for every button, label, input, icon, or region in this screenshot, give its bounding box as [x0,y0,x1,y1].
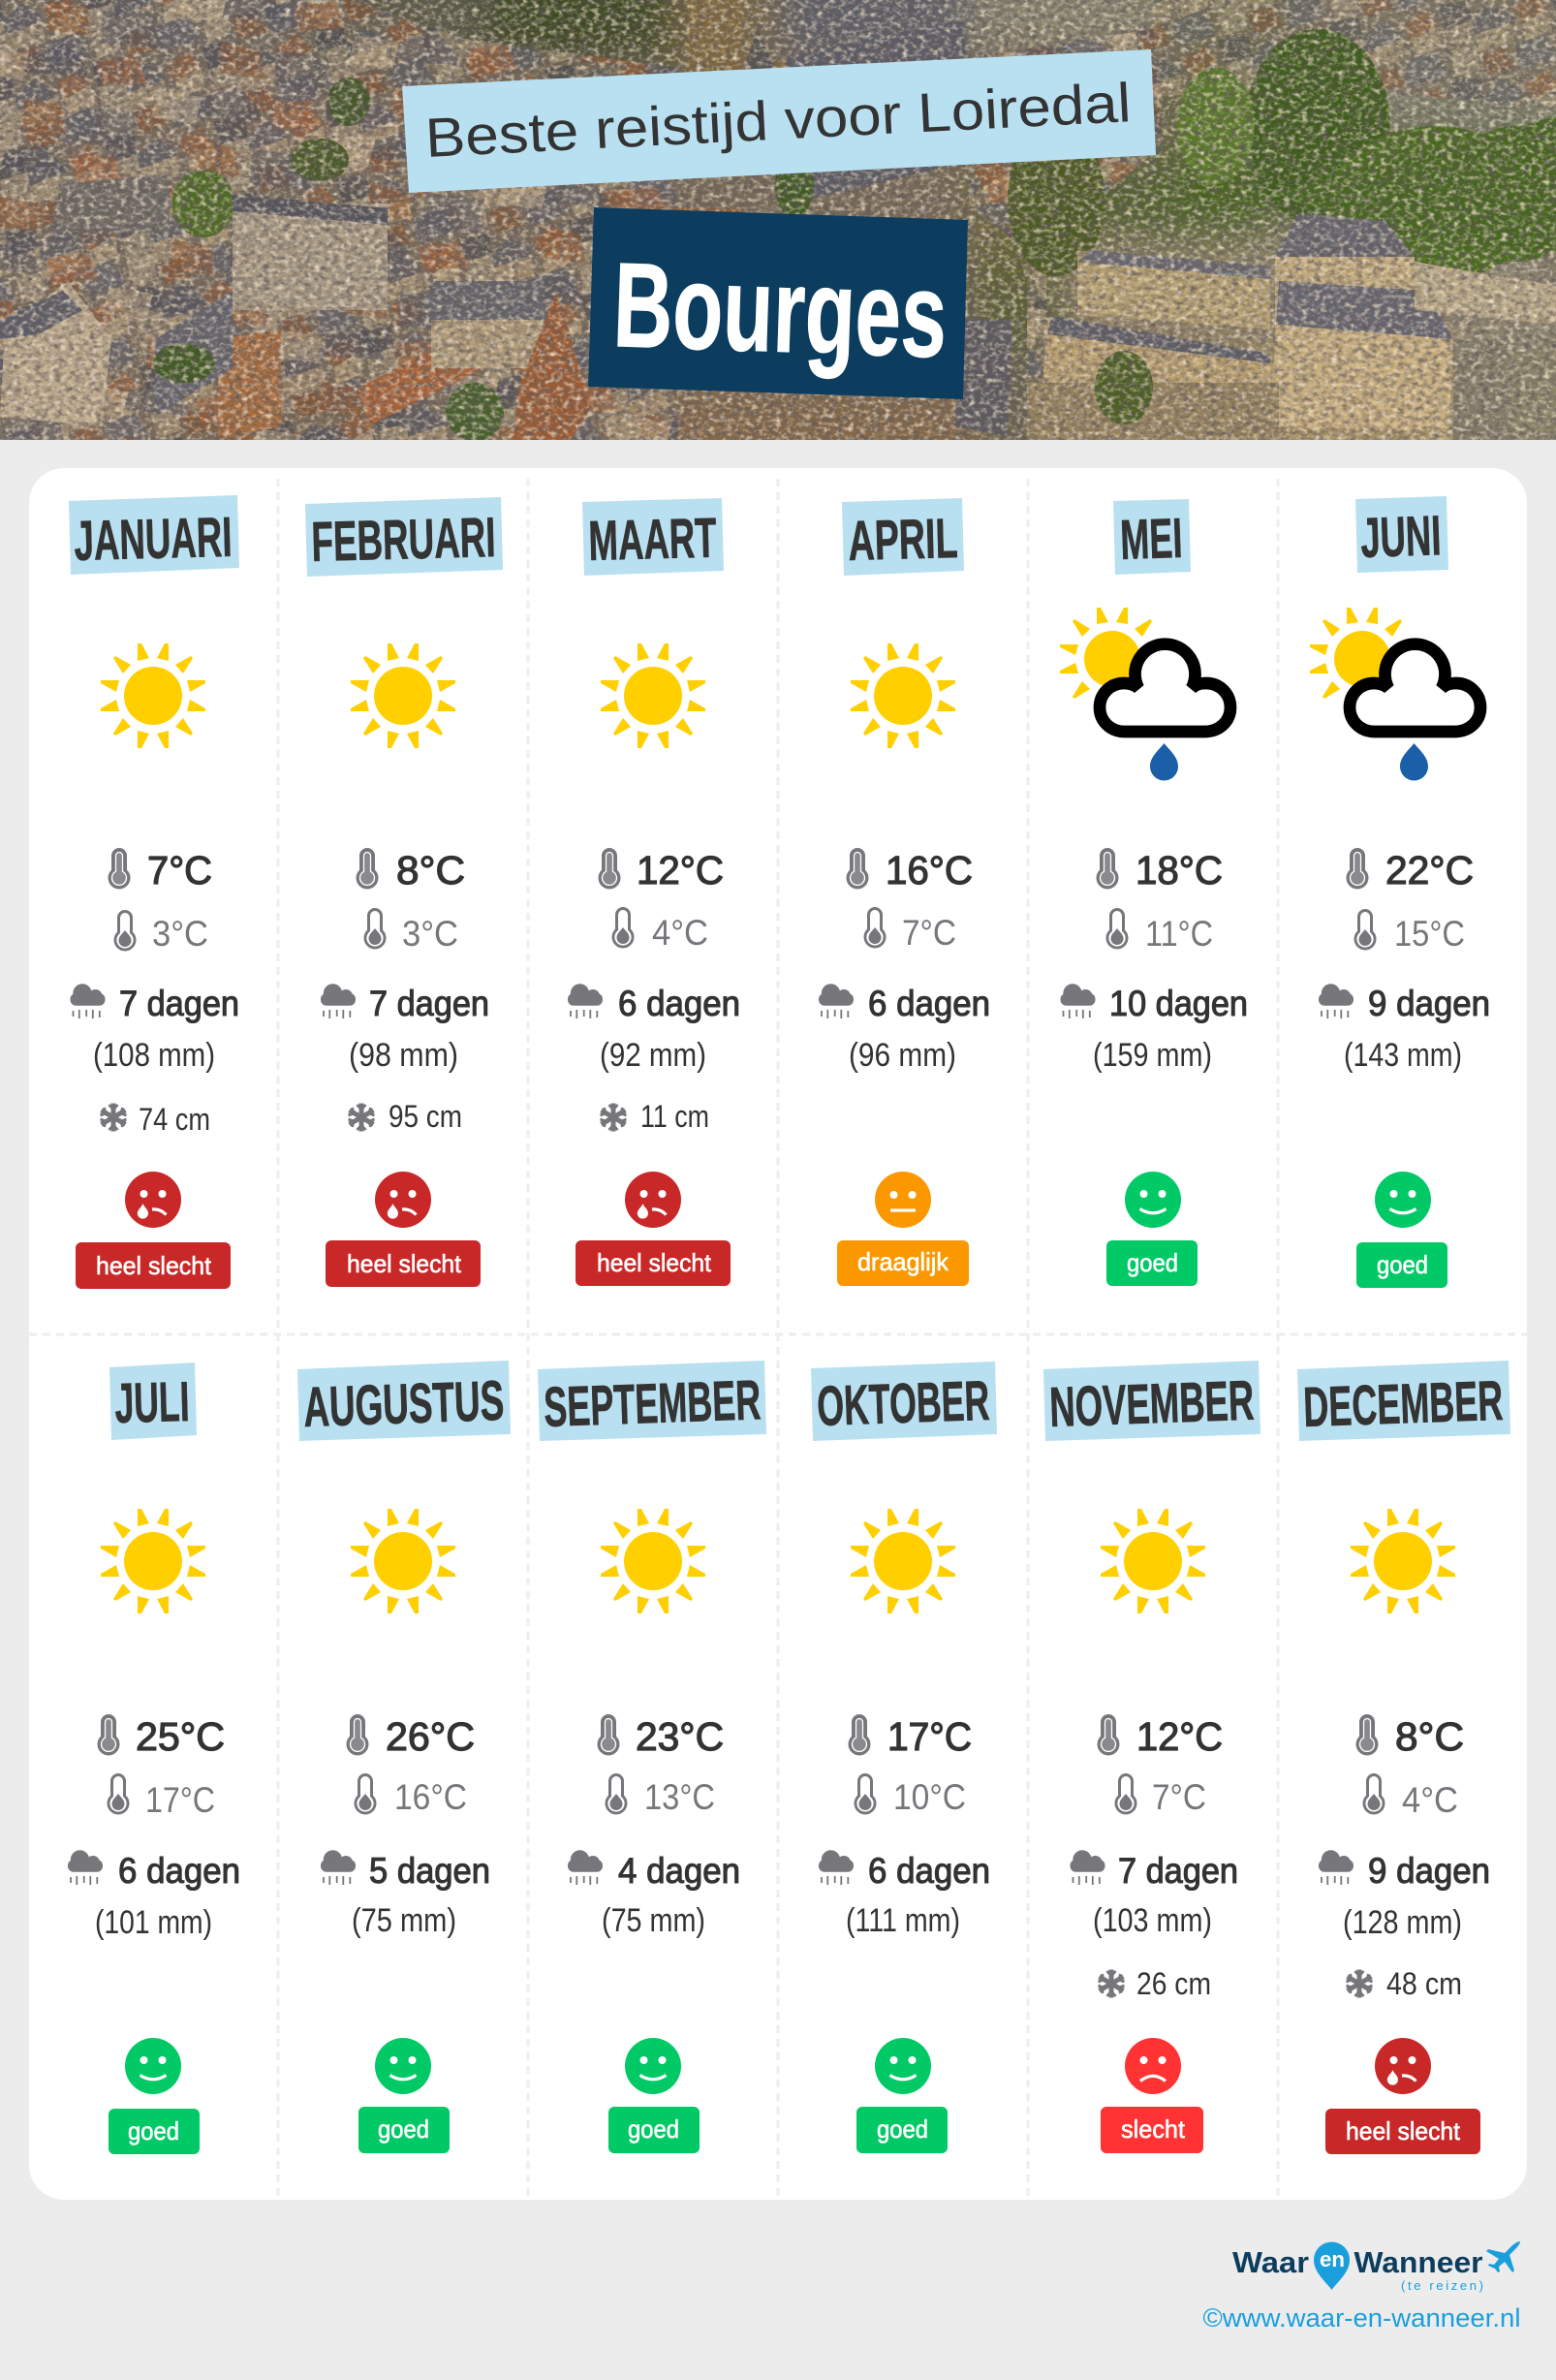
month heading [109,1362,197,1440]
rating badge [1356,1242,1447,1288]
snowfall: 74 cm [139,1102,210,1137]
icon: thermometer low [114,910,136,951]
icon: sun [101,1509,205,1613]
icon: thermometer low [1362,1773,1385,1814]
rain days: 6 dagen [118,1851,240,1891]
rating badge [358,2107,450,2153]
icon: thermometer low [364,908,386,949]
header photo: aerial view of Bourges [0,0,1556,440]
title banner [402,49,1156,193]
min temperature: 13°C [644,1777,715,1817]
icon: very sad face [125,1172,181,1228]
min temperature: 4°C [1402,1780,1458,1820]
month heading [1355,496,1448,573]
rating badge: goed [1127,1248,1178,1277]
rating badge: heel slecht [597,1248,712,1277]
rain days: 9 dagen [1368,984,1490,1023]
icon: rain [321,1850,356,1885]
max temperature: 12°C [637,848,724,892]
icon: thermometer high [357,848,378,889]
icon: rain [1319,984,1354,1018]
icon: thermometer high [849,1714,870,1755]
rain days: 6 dagen [618,984,740,1023]
rating badge: heel slecht [96,1251,212,1280]
rain days: 7 dagen [119,984,239,1023]
snowfall: 48 cm [1386,1966,1462,2001]
min temperature: 4°C [652,913,708,953]
icon: thermometer low [855,1773,876,1814]
month heading [297,1361,511,1441]
icon: thermometer high [1356,1714,1378,1755]
rain days: 6 dagen [868,1851,990,1891]
icon: happy face [1125,1172,1181,1228]
max temperature: 26°C [386,1714,475,1759]
rainfall: (103 mm) [1093,1902,1212,1939]
icon: rain [1070,1850,1105,1885]
rating badge [856,2107,948,2153]
max temperature: 17°C [887,1714,972,1759]
max temperature: 8°C [1395,1714,1464,1759]
icon: thermometer high [599,848,620,889]
rain days: 4 dagen [618,1851,740,1891]
month heading: NOVEMBER [1048,1369,1255,1439]
rating badge: goed [628,2114,679,2144]
rainfall: (128 mm) [1343,1904,1462,1941]
snowfall: 26 cm [1136,1966,1211,2001]
icon: sun [351,643,455,748]
min temperature: 3°C [152,914,208,954]
month heading: APRIL [848,507,958,573]
city name block [588,207,968,399]
rating badge [576,1240,731,1286]
month heading [1043,1361,1260,1441]
icon: sun [351,1509,455,1613]
month: september [538,1361,766,2153]
icon: rain [70,984,105,1018]
rainfall: (143 mm) [1344,1037,1462,1074]
icon: thermometer high [109,848,130,889]
month heading [538,1361,766,1441]
rainfall: (75 mm) [352,1902,456,1939]
min temperature: 7°C [1152,1777,1206,1817]
icon: thermometer high [1097,848,1118,889]
rating badge [837,1240,969,1286]
rating badge: heel slecht [347,1249,462,1278]
rain days: 9 dagen [1368,1851,1490,1891]
icon: happy face [1375,1172,1431,1228]
logo: Waar en Wanneer: Waar [1232,2245,1309,2279]
rain days: 7 dagen [1118,1851,1238,1891]
icon: happy face [875,2038,931,2094]
month: februari [305,497,503,1287]
icon: sun and rain cloud [1060,608,1230,781]
rain days: 6 dagen [868,984,990,1023]
min temperature: 3°C [402,914,458,954]
min temperature: 7°C [902,913,956,953]
min temperature: 15°C [1394,914,1465,954]
rating badge: goed [877,2114,928,2144]
month heading [1113,499,1191,575]
month: november [1043,1361,1260,2153]
rooftops of the old town [0,0,1556,440]
icon: happy face [375,2038,431,2094]
title banner: Beste reistijd voor Loiredal [423,72,1133,170]
city name block: Bourges [611,238,949,383]
icon: thermometer high [1097,1714,1120,1755]
icon: thermometer high [347,1714,368,1755]
icon: thermometer low [355,1773,376,1814]
icon: very sad face [375,1172,431,1228]
logo: Waar en Wanneer [1232,2241,1520,2293]
copyright url: ©www.waar-en-wanneer.nl [1203,2303,1521,2333]
icon: rain [1319,1850,1354,1885]
icon: snow [1347,1969,1372,1998]
rainfall: (111 mm) [846,1902,960,1939]
icon: sun [1351,1509,1455,1613]
icon: sun [1101,1509,1205,1613]
month: december [1297,1361,1510,2154]
rating badge: draaglijk [857,1247,949,1276]
month heading: MAART [588,507,717,573]
icon: very sad face [1375,2038,1431,2094]
logo: Waar en Wanneer: Wanneer [1354,2245,1482,2279]
forest [172,29,1556,281]
icon: rain [568,984,603,1018]
icon: happy face [125,2038,181,2094]
rating badge [608,2107,700,2153]
icon: rain [68,1850,103,1885]
icon: snow [101,1103,126,1132]
max temperature: 18°C [1136,848,1223,892]
rating badge [1325,2109,1480,2154]
month heading [842,498,964,576]
chateau and buildings [0,174,1556,441]
month: juli [68,1362,240,2154]
icon: thermometer low [605,1773,628,1814]
rainfall: (101 mm) [95,1904,212,1941]
rainfall: (98 mm) [349,1037,458,1074]
cathedral [688,0,975,204]
rain days: 7 dagen [369,984,489,1023]
rainfall: (108 mm) [93,1037,215,1074]
rain days: 5 dagen [369,1851,490,1891]
icon: rain [1060,984,1095,1018]
logo: Waar en Wanneer: en [1320,2247,1345,2271]
month heading [305,497,503,577]
panel: climate table [29,468,1527,2200]
month heading: AUGUSTUS [302,1369,505,1439]
month: oktober [811,1362,997,2153]
rainfall: (92 mm) [600,1037,706,1074]
month: maart [568,498,740,1286]
rating badge [1106,1240,1198,1286]
icon: thermometer high [97,1714,120,1755]
month heading: FEBRUARI [311,506,496,574]
logo: Waar en Wanneer: (te reizen) [1401,2278,1483,2293]
max temperature: 8°C [396,848,465,892]
month: januari [69,495,239,1289]
min temperature: 11°C [1145,914,1213,954]
month heading [69,495,239,575]
month: mei [1060,499,1248,1286]
icon: snow [601,1103,626,1132]
icon: thermometer low [1106,908,1128,949]
icon: sad face [1125,2038,1181,2094]
icon: sun [851,1509,955,1613]
max temperature: 23°C [636,1714,724,1759]
rating badge [109,2109,200,2154]
snowfall: 11 cm [640,1099,709,1134]
rainfall: (75 mm) [602,1902,705,1939]
month heading: JUNI [1359,504,1442,570]
icon: sun [101,643,205,748]
month heading [811,1362,997,1441]
icon: thermometer high [1347,848,1368,889]
max temperature: 25°C [136,1714,225,1759]
max temperature: 22°C [1385,848,1474,892]
icon: rain [819,1850,854,1885]
icon: thermometer high [847,848,868,889]
max temperature: 7°C [147,848,212,892]
icon: thermometer low [1114,1773,1137,1814]
month: augustus [297,1361,511,2153]
snowfall: 95 cm [389,1099,462,1134]
icon: rain [568,1850,603,1885]
icon: sun [851,643,955,748]
min temperature: 17°C [145,1780,215,1820]
rating badge [1101,2107,1203,2153]
icon: very sad face [625,1172,681,1228]
rainfall: (159 mm) [1093,1037,1212,1074]
max temperature: 12°C [1136,1714,1223,1759]
month heading [582,498,724,576]
max temperature: 16°C [886,848,973,892]
month heading: OKTOBER [816,1369,990,1438]
month: april [819,498,990,1286]
rating badge: slecht [1121,2114,1186,2144]
month: juni [1310,496,1490,1288]
month heading: SEPTEMBER [543,1368,762,1439]
icon: happy face [625,2038,681,2094]
rating badge: goed [1377,1250,1428,1279]
icon: thermometer low [864,907,886,948]
icon: sun and rain cloud [1310,608,1480,781]
rating badge: goed [378,2114,429,2144]
month heading: JULI [114,1370,190,1435]
icon: sun [601,1509,705,1613]
icon: neutral face [875,1172,931,1228]
rating badge [326,1240,481,1287]
min temperature: 16°C [394,1777,467,1817]
icon: snow [1099,1969,1124,1998]
month heading: JANUARI [74,506,233,573]
rain days: 10 dagen [1109,984,1248,1023]
min temperature: 10°C [893,1777,966,1817]
rainfall: (96 mm) [849,1037,956,1074]
icon: sun [601,643,705,748]
icon: thermometer low [1354,909,1376,950]
icon: snow [349,1103,374,1132]
rating badge: goed [128,2116,179,2145]
rating badge [76,1242,231,1289]
icon: thermometer low [107,1773,130,1814]
icon: thermometer low [612,907,634,948]
icon: rain [321,984,356,1018]
rating badge: heel slecht [1346,2116,1461,2145]
icon: thermometer high [597,1714,620,1755]
month heading: MEI [1119,507,1183,572]
icon: rain [819,984,854,1018]
